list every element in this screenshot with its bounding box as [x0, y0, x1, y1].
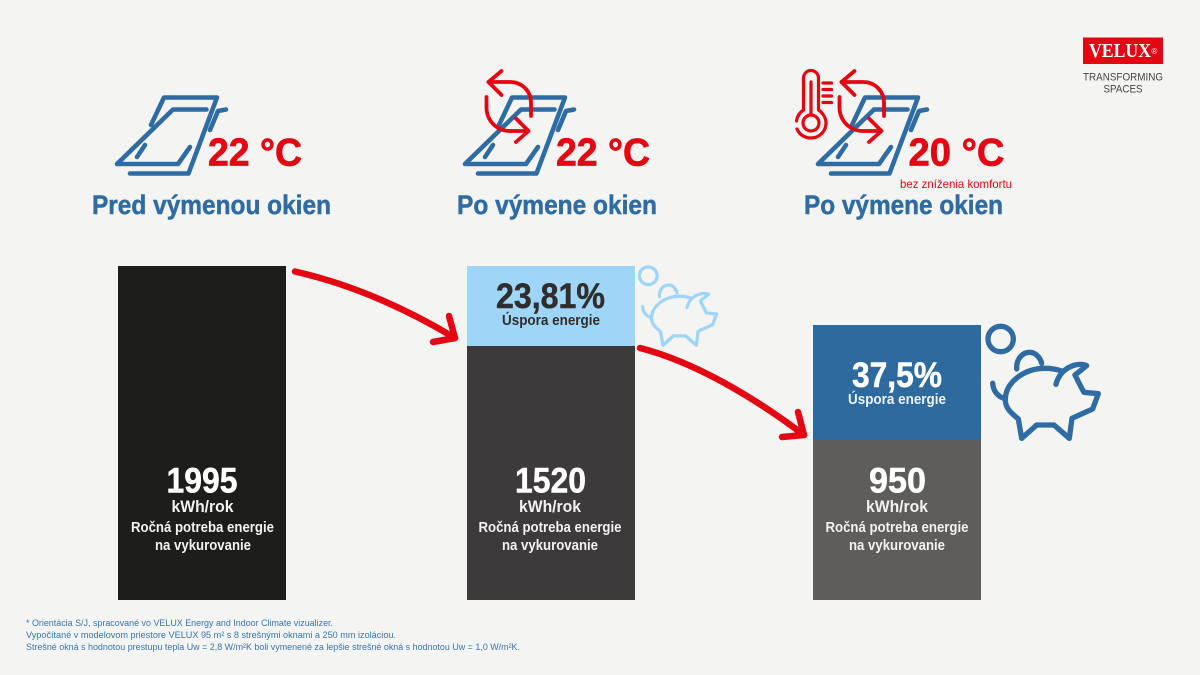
bar: before replacement 1995 kWh/rok: Ročná potreba energie	[131, 520, 274, 536]
bar: before replacement 1995 kWh/rok	[118, 266, 286, 600]
heading: Po výmene okien: Po výmene okien	[457, 190, 657, 220]
icon: roof window	[117, 98, 226, 174]
icon: dark blue piggy bank	[988, 326, 1098, 438]
icon: roof window	[465, 98, 574, 174]
bar: before replacement 1995 kWh/rok: kWh/rok	[172, 498, 234, 516]
energy demand segment: Ročná potreba energie	[826, 520, 968, 536]
bar: after replacement 950 kWh/rok with 37,5% saving	[813, 325, 981, 600]
logo: VELUX Transforming Spaces: SPACES	[1104, 84, 1142, 96]
temperature 22 °C: 22 °C	[208, 132, 302, 174]
temperature 22 °C: 22 °C	[556, 132, 650, 174]
logo: VELUX Transforming Spaces: VELUX	[1089, 40, 1151, 62]
panel: before window replacement header	[92, 98, 331, 220]
energy demand segment: Ročná potreba energie	[478, 520, 622, 536]
logo: VELUX Transforming Spaces	[1083, 38, 1163, 96]
saving segment: 23,81%	[496, 277, 605, 316]
heading: Pred výmenou okien: Pred výmenou okien	[92, 190, 331, 220]
footnote	[26, 618, 520, 653]
bar: before replacement 1995 kWh/rok: na vykurovanie	[155, 538, 251, 554]
saving segment	[467, 266, 635, 346]
footnote: Vypočítané v modelovom priestore VELUX 95 m² s 8 strešnými oknami a 250 mm izoláciou.	[26, 630, 396, 641]
heading: Po výmene okien: Po výmene okien	[804, 190, 1003, 220]
panel: after window replacement header, 22 °C	[457, 71, 657, 220]
saving segment: Úspora energie	[848, 390, 946, 408]
arrow: second bar to third bar	[640, 348, 804, 437]
footnote: Strešné okná s hodnotou prestupu tepla Uw = 2,8 W/m²K boli vymenené za lepšie strešné okná s hodnotou Uw = 1,0 W/m²K.	[26, 642, 520, 653]
energy demand segment: na vykurovanie	[849, 538, 945, 554]
saving segment: 37,5%	[852, 356, 942, 395]
icon: replacement arrows	[486, 71, 531, 142]
icon: thermometer	[796, 71, 832, 138]
energy demand segment: 1520	[515, 462, 586, 500]
icon: roof window	[818, 98, 927, 174]
energy demand segment: 950	[869, 462, 926, 500]
energy demand segment: kWh/rok	[866, 498, 929, 516]
temperature 20 °C: 20 °C	[908, 132, 1004, 174]
logo: VELUX Transforming Spaces: TRANSFORMING	[1083, 72, 1163, 84]
saving segment: Úspora energie	[502, 311, 600, 329]
footnote: * Orientácia S/J, spracované vo VELUX Energy and Indoor Climate vizualizer.	[26, 618, 333, 629]
bar: before replacement 1995 kWh/rok: 1995	[166, 462, 238, 500]
arrow: first bar to second bar	[295, 272, 455, 342]
energy demand segment: na vykurovanie	[502, 538, 598, 554]
energy demand segment	[813, 440, 981, 600]
logo: VELUX Transforming Spaces: ®	[1152, 47, 1158, 56]
energy demand segment: kWh/rok	[519, 498, 582, 516]
energy demand segment	[467, 346, 635, 600]
icon: light blue piggy bank	[639, 267, 717, 345]
saving segment	[813, 325, 981, 440]
bar: after replacement 1520 kWh/rok with 23,81% saving	[467, 266, 635, 600]
panel: after window replacement header, 20 °C	[796, 71, 1012, 220]
icon: replacement arrows	[840, 71, 884, 142]
note: bez zníženia komfortu: bez zníženia komfortu	[900, 177, 1012, 191]
